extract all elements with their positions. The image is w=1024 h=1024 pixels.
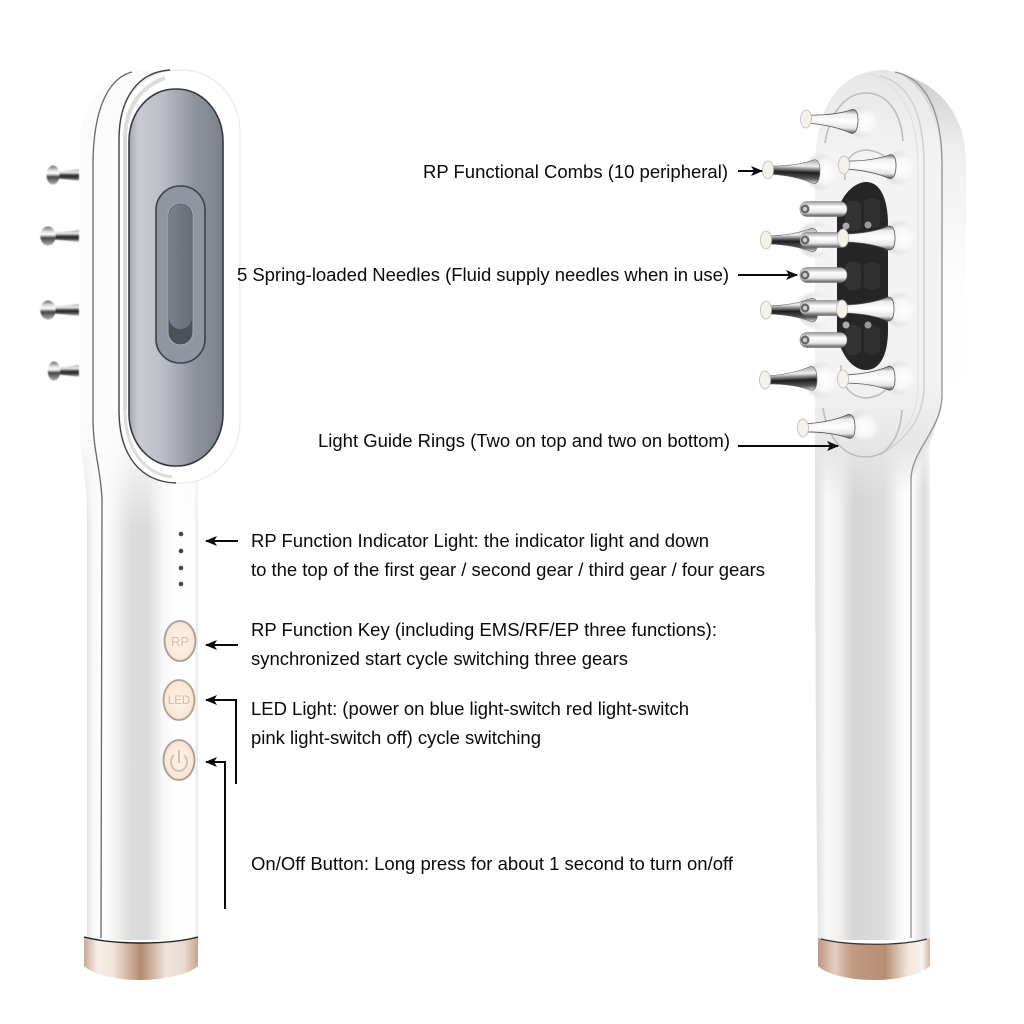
comb bottom — [797, 414, 855, 440]
collar around panel — [119, 70, 240, 483]
arrow: LED light — [206, 700, 236, 784]
slider slot — [168, 203, 193, 345]
inner ring lower — [841, 365, 886, 398]
handle body — [80, 70, 198, 940]
label: indicator light: RP Function Indicator Light: the indicator light and down — [251, 530, 709, 551]
pin 4 — [48, 362, 79, 380]
arrow: spring-loaded needles — [738, 274, 797, 276]
comb lower left — [759, 366, 817, 392]
handle — [815, 440, 930, 940]
light guide rings — [823, 93, 903, 457]
comb — [760, 228, 818, 252]
comb — [760, 298, 818, 322]
comb lower right — [837, 366, 895, 391]
LED button — [164, 680, 194, 720]
left pins — [40, 166, 79, 380]
slider thumb — [169, 204, 192, 329]
head front face — [815, 70, 941, 498]
grey panel — [129, 89, 223, 466]
copper base — [818, 938, 930, 980]
RP button: RP — [171, 634, 189, 649]
bottom ring — [823, 408, 902, 457]
needle 4 — [800, 300, 847, 316]
label: LED light — [251, 698, 689, 748]
right device: back view of comb — [759, 70, 966, 980]
label: RP functional combs: RP Functional Combs (10 peripheral) — [423, 161, 728, 182]
label: RP function key: synchronized start cycle switching three gears — [251, 648, 628, 669]
needle 1 — [800, 202, 847, 216]
left device: front view of comb — [40, 70, 240, 980]
label: indicator light: to the top of the first gear / second gear / third gear / four gears — [251, 559, 765, 580]
seam lines — [895, 72, 942, 938]
black needle plate — [837, 182, 888, 370]
label: spring-loaded needles: 5 Spring-loaded Needles (Fluid supply needles when in use) — [237, 264, 729, 285]
top ring — [825, 93, 903, 143]
comb top — [800, 107, 859, 134]
label: LED light: pink light-switch off) cycle switching — [251, 727, 541, 748]
head shell side — [880, 70, 966, 490]
left-row combs under needles — [760, 228, 818, 322]
shell seam line — [93, 72, 132, 938]
5 spring-loaded needles — [800, 202, 847, 348]
comb upper left — [762, 158, 820, 184]
comb middle right 1 — [838, 226, 895, 250]
RP button — [164, 621, 196, 661]
comb middle right 2 — [836, 297, 894, 321]
indicator dots — [179, 532, 183, 586]
label: light guide rings: Light Guide Rings (Two on top and two on bottom) — [318, 430, 730, 451]
label: indicator light — [251, 530, 765, 580]
arrow: light guide rings — [738, 445, 838, 447]
arrow: RP function key — [206, 644, 238, 646]
arrow: on/off button — [206, 762, 225, 909]
label: RP function key — [251, 619, 717, 669]
arrow: RP functional combs — [738, 170, 762, 172]
inner ring upper — [845, 150, 888, 180]
copper base — [84, 937, 198, 980]
peripheral combs — [759, 107, 896, 440]
comb upper right — [838, 153, 896, 179]
peripheral comb sockets — [798, 107, 916, 442]
arrow: indicator light — [206, 540, 238, 542]
pin 1 — [46, 166, 79, 184]
pin 2 — [40, 226, 79, 246]
label: LED light: LED Light: (power on blue light-switch red light-switch — [251, 698, 689, 719]
slider housing — [156, 186, 205, 363]
needle 2 — [800, 232, 847, 248]
power button — [164, 740, 194, 780]
needle 5 — [800, 332, 847, 348]
label: RP function key: RP Function Key (including EMS/RF/EP three functions): — [251, 619, 717, 640]
LED button: LED — [168, 695, 190, 707]
label: on/off button: On/Off Button: Long press for about 1 second to turn on/off — [251, 853, 734, 874]
needle 3 — [800, 268, 847, 282]
pin 3 — [40, 300, 79, 320]
head shell — [80, 70, 198, 530]
